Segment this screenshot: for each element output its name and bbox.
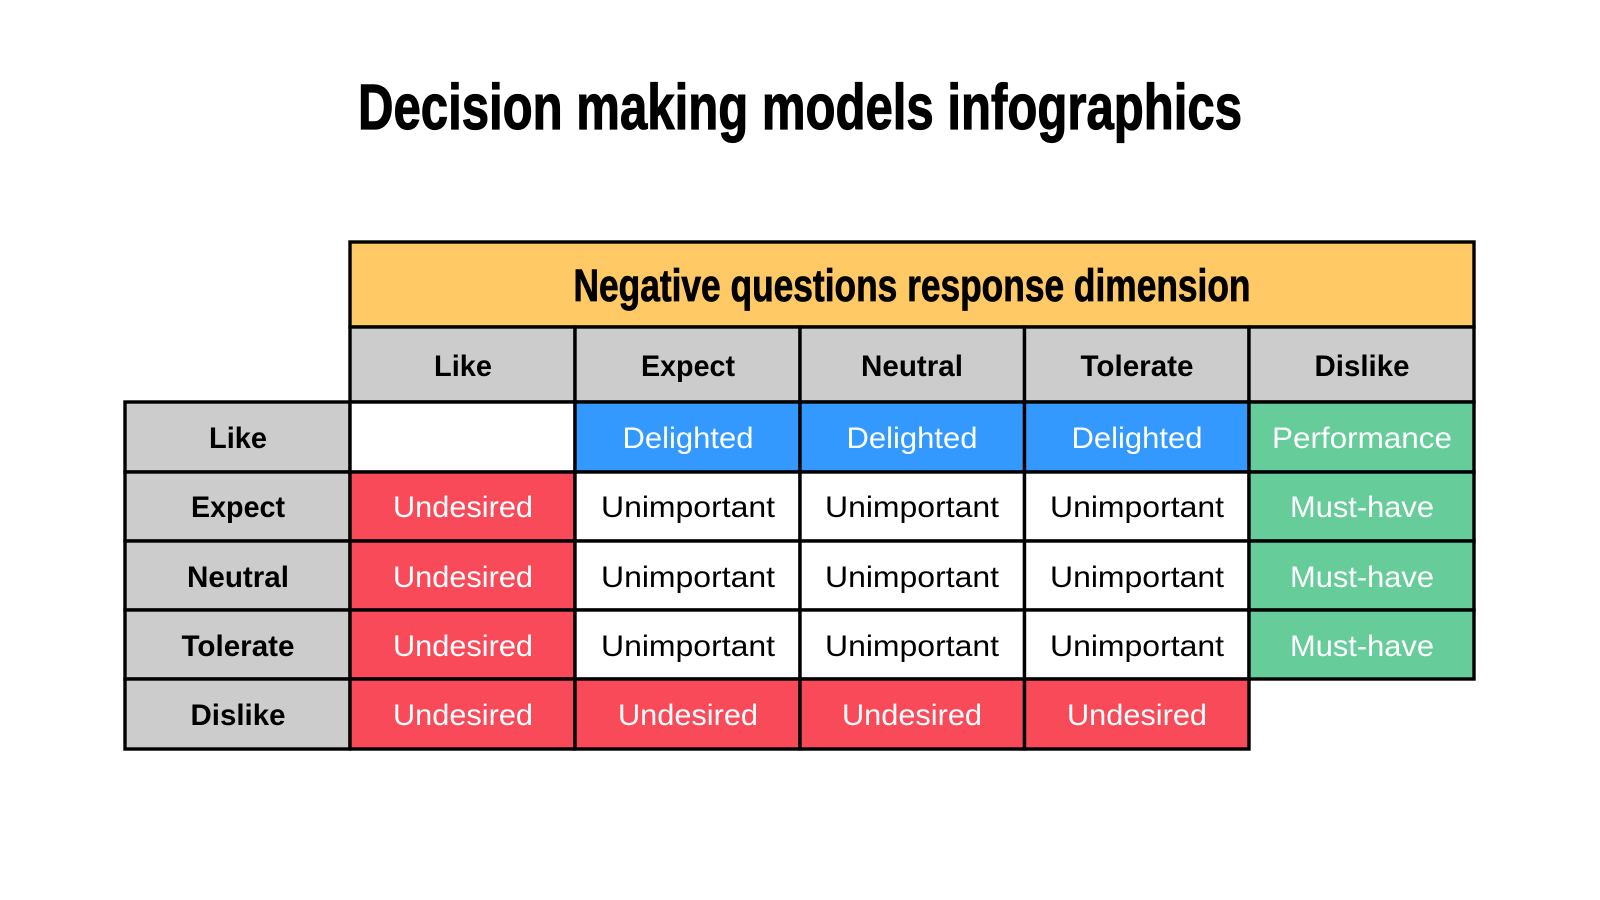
cell: Dislike / Tolerate: Undesired: [1067, 699, 1207, 732]
cell: Tolerate / Like: Undesired: [393, 630, 533, 663]
cell: Like / Expect: Delighted: [622, 422, 754, 455]
cell: Tolerate / Dislike: [1249, 610, 1474, 679]
cell: Tolerate / Neutral: Unimportant: [825, 630, 1000, 663]
panel: negative questions header: Negative questions response dimension: [574, 260, 1250, 311]
column header: Dislike: [1249, 327, 1474, 402]
row header: Dislike: [125, 679, 350, 749]
row header: Neutral: [125, 541, 350, 610]
row header: Dislike: Dislike: [190, 699, 286, 732]
row header: Expect: [125, 472, 350, 541]
cell: Neutral / Neutral: [800, 541, 1024, 610]
cell: Tolerate / Tolerate: [1024, 610, 1249, 679]
cell: Neutral / Expect: [575, 541, 800, 610]
cell: Like / Tolerate: Delighted: [1072, 422, 1202, 455]
row header: Tolerate: Tolerate: [182, 630, 294, 663]
column header: Neutral: Neutral: [861, 350, 963, 383]
title: Decision making models infographics: [358, 71, 1242, 143]
cell: Like / Dislike: [1249, 402, 1474, 472]
cell: Dislike / Like: [350, 679, 575, 749]
cell: Expect / Neutral: Unimportant: [825, 491, 1000, 524]
cell: Expect / Like: Undesired: [393, 491, 533, 524]
row header: Expect: Expect: [191, 491, 285, 524]
cell: Like / Neutral: Delighted: [846, 422, 978, 455]
cell: Like / Dislike: Performance: [1272, 422, 1452, 455]
empty cell: Like / Like: [350, 402, 575, 472]
column header: Tolerate: Tolerate: [1080, 350, 1194, 383]
cell: Like / Expect: [575, 402, 800, 472]
cell: Expect / Dislike: Must-have: [1290, 491, 1434, 524]
cell: Dislike / Expect: Undesired: [618, 699, 758, 732]
row header: Tolerate: [125, 610, 350, 679]
cell: Dislike / Tolerate: [1024, 679, 1249, 749]
cell: Expect / Dislike: [1249, 472, 1474, 541]
column header: Neutral: [800, 327, 1024, 402]
column header: Expect: [575, 327, 800, 402]
cell: Tolerate / Tolerate: Unimportant: [1050, 630, 1225, 663]
cell: Expect / Expect: [575, 472, 800, 541]
cell: Dislike / Neutral: [800, 679, 1024, 749]
cell: Neutral / Dislike: [1249, 541, 1474, 610]
cell: Expect / Tolerate: [1024, 472, 1249, 541]
cell: Neutral / Like: [350, 541, 575, 610]
cell: Expect / Expect: Unimportant: [601, 491, 776, 524]
cell: Neutral / Tolerate: Unimportant: [1050, 561, 1225, 594]
cell: Tolerate / Expect: [575, 610, 800, 679]
cell: Expect / Neutral: [800, 472, 1024, 541]
column header: Tolerate: [1024, 327, 1249, 402]
cell: Like / Tolerate: [1024, 402, 1249, 472]
cell: Dislike / Like: Undesired: [393, 699, 533, 732]
column header: Expect: Expect: [641, 350, 735, 383]
cell: Tolerate / Neutral: [800, 610, 1024, 679]
cell: Expect / Like: [350, 472, 575, 541]
decision matrix table: [125, 242, 1474, 749]
cell: Neutral / Tolerate: [1024, 541, 1249, 610]
row header: Neutral: Neutral: [187, 561, 289, 594]
row header: Like: Like: [209, 422, 267, 455]
cell: Tolerate / Dislike: Must-have: [1290, 630, 1434, 663]
column header: Like: [350, 327, 575, 402]
row header: Like: [125, 402, 350, 472]
cell: Neutral / Like: Undesired: [393, 561, 533, 594]
cell: Neutral / Expect: Unimportant: [601, 561, 776, 594]
column header: Dislike: Dislike: [1314, 350, 1410, 383]
cell: Neutral / Neutral: Unimportant: [825, 561, 1000, 594]
cell: Tolerate / Expect: Unimportant: [601, 630, 776, 663]
cell: Dislike / Expect: [575, 679, 800, 749]
column header: Like: Like: [434, 350, 492, 383]
cell: Neutral / Dislike: Must-have: [1290, 561, 1434, 594]
cell: Dislike / Neutral: Undesired: [842, 699, 982, 732]
cell: Expect / Tolerate: Unimportant: [1050, 491, 1225, 524]
cell: Like / Neutral: [800, 402, 1024, 472]
panel: negative questions header: [350, 242, 1474, 327]
cell: Tolerate / Like: [350, 610, 575, 679]
